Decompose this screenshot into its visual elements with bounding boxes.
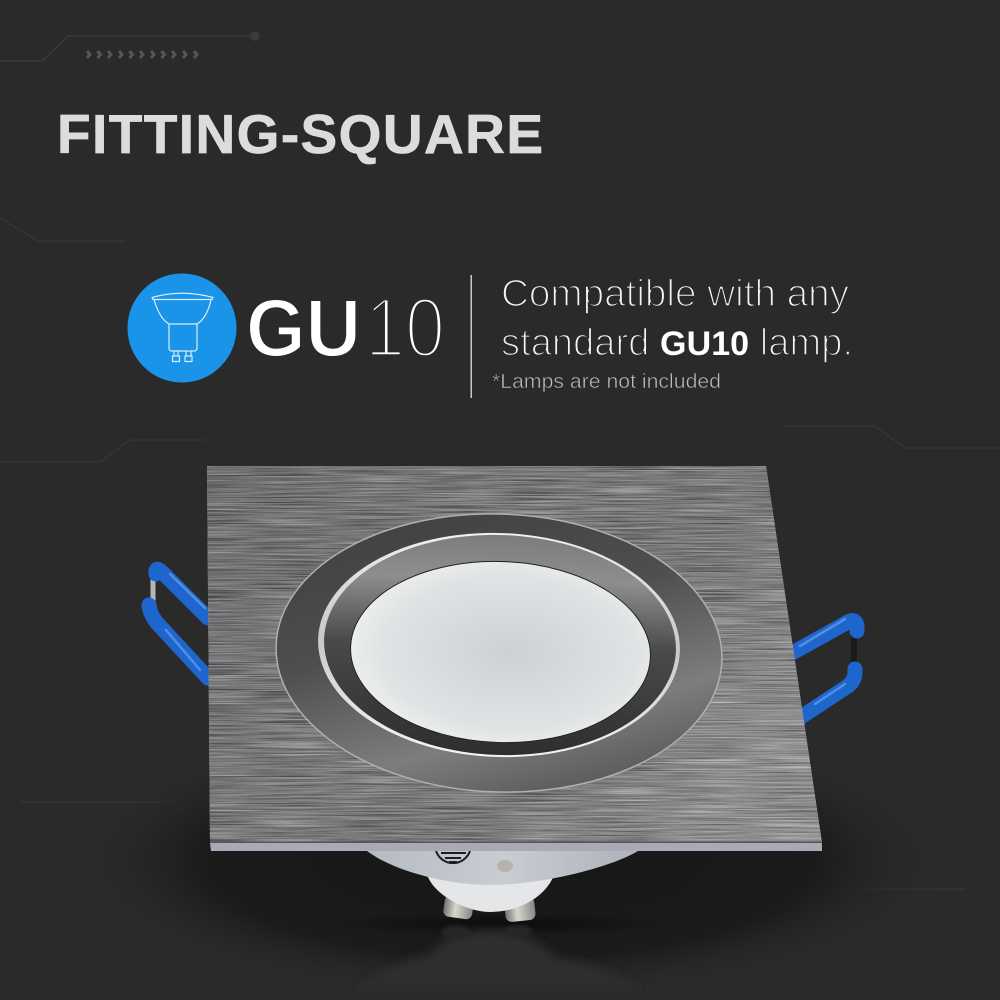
GU10 logotype: GU: [246, 283, 361, 374]
recessed ring and lens: [271, 506, 727, 800]
text block: compatibility: standard GU10 lamp.: [501, 322, 853, 364]
circuit lines: background traces: [0, 218, 1000, 889]
frosted lens: [347, 556, 654, 748]
GU10 logotype: 10: [365, 280, 445, 374]
left spring clip: [149, 569, 208, 678]
title: FITTING-SQUARE: [57, 103, 543, 165]
text block: compatibility: *Lamps are not included: [492, 371, 721, 393]
lamp pins: [443, 894, 536, 923]
divider: [470, 275, 472, 398]
floor shadow: [70, 720, 950, 1000]
GU10 white lamp base: [427, 875, 554, 912]
GU10 logotype: [246, 280, 445, 374]
icon: GU10 lamp in blue circle: [128, 274, 236, 382]
chrome bezel: [314, 527, 684, 763]
floor reflection: [355, 925, 640, 990]
rivet: [497, 860, 513, 872]
housing: [367, 851, 638, 885]
circuit line decoration: top left: [0, 32, 259, 61]
chevron row: [87, 51, 197, 58]
text block: compatibility: [492, 273, 853, 393]
right spring clip: [794, 619, 857, 719]
square aluminium plate: [200, 460, 830, 851]
text block: compatibility: Compatible with any: [501, 273, 849, 315]
icon: ground symbol: [436, 851, 470, 863]
